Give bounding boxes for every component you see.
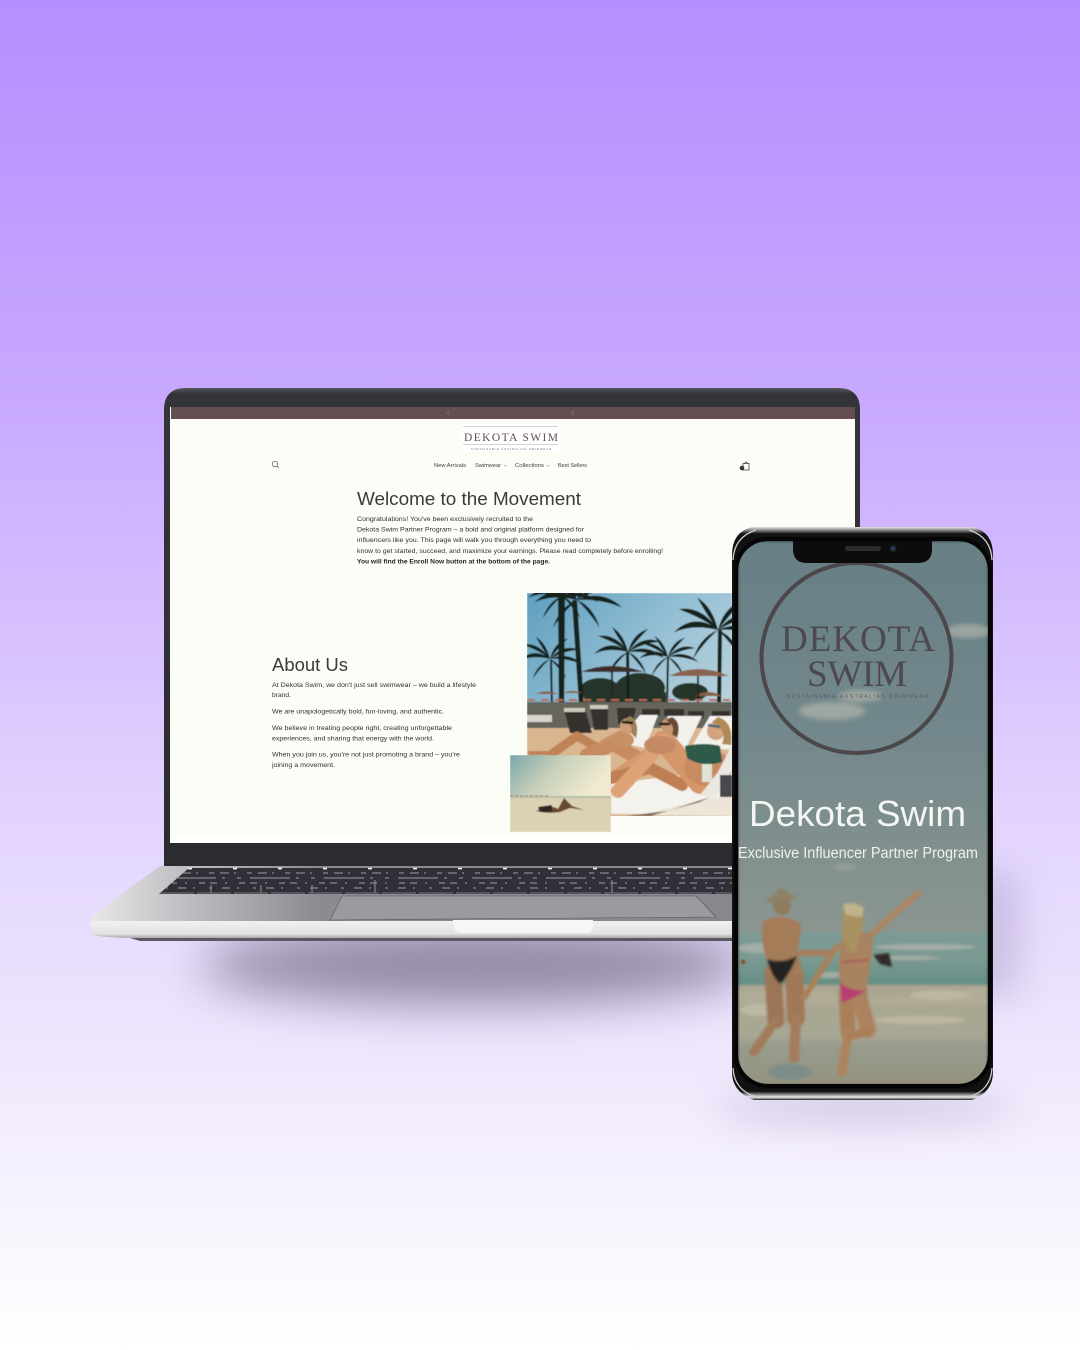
phone screen (738, 541, 990, 1085)
phone body (732, 527, 993, 1100)
clouds (799, 624, 990, 869)
distant swimmer (740, 960, 746, 964)
photo: poolside palms and loungers (527, 593, 732, 816)
background video: beach scene (738, 541, 988, 1085)
lounger mattress (611, 768, 732, 814)
icon: search (272, 461, 279, 468)
welcome paragraph: You will find the Enroll Now button at the bottom of the page. (357, 558, 550, 566)
running women silhouettes (754, 889, 919, 1072)
white cushions (629, 714, 732, 750)
about paragraph: At Dekota Swim, we don't just sell swimwear – we build a lifestyle (272, 682, 476, 689)
circular brand logo: DEKOTA (781, 619, 935, 660)
sunbathers (530, 733, 700, 791)
heading: about us: About Us (272, 655, 348, 675)
welcome paragraph (357, 516, 663, 566)
phone shadow (715, 870, 1020, 1124)
laptop trackpad (330, 896, 716, 920)
laptop trackpad notch (453, 920, 593, 933)
palm trees (527, 593, 732, 703)
welcome paragraph: Congratulations! You've been exclusively recruited to the (357, 516, 533, 523)
phone inner bezel (736, 539, 990, 1086)
welcome paragraph: know to get started, succeed, and maximize your earnings. Please read completely before enrolling! (357, 548, 663, 555)
heading: welcome: Welcome to the Movement (357, 488, 581, 509)
navigation menu (434, 463, 587, 469)
website screen (170, 407, 855, 843)
heads and hair (707, 722, 725, 740)
phone title: Dekota Swim (749, 793, 966, 834)
smartphone (732, 527, 993, 1100)
right woman (804, 893, 919, 1072)
circular brand logo: SWIM (807, 654, 907, 695)
brand logo: DEKOTA SWIM (464, 432, 558, 444)
deck and sand (527, 702, 732, 730)
phone side highlights (733, 530, 992, 1097)
cover-up and drink (700, 745, 732, 798)
circular brand logo: SUSTAINABLE AUSTRALIAN SWIMWEAR (787, 694, 928, 700)
navigation menu: Swimwear (475, 463, 501, 469)
laptop front edge (91, 921, 740, 938)
about paragraph: brand. (272, 692, 291, 699)
photo: woman on the beach (510, 755, 611, 832)
phone notch (793, 541, 932, 563)
icon: shopping bag (740, 462, 749, 470)
left woman (754, 889, 829, 1058)
sun umbrellas (581, 666, 644, 672)
screen background (170, 407, 855, 843)
laptop (91, 388, 860, 941)
laptop underside line (130, 938, 740, 941)
about paragraph: When you join us, you're not just promoting a brand – you're (272, 752, 460, 758)
distant red umbrellas (527, 699, 730, 701)
horizon trees (580, 673, 708, 706)
navigation menu: Collections (515, 463, 544, 469)
about paragraph: We believe in treating people right, creating unforgettable (272, 725, 452, 732)
about paragraph: experiences, and sharing that energy with the world. (272, 736, 434, 742)
circular brand logo (762, 563, 952, 753)
navigation menu: Best Sellers (558, 463, 587, 469)
phone subtitle: Exclusive Influencer Partner Program (738, 845, 978, 862)
about paragraph: joining a movement. (271, 762, 335, 769)
announcement bar (171, 407, 855, 419)
welcome paragraph: influencers like you. This page will walk you through everything you need to (357, 537, 591, 544)
welcome paragraph: Dekota Swim Partner Program – a bold and original platform designed for (357, 526, 585, 534)
laptop keyboard (159, 868, 740, 894)
brand logo: SUSTAINABLE AUSTRALIAN SWIMWEAR (471, 447, 551, 451)
about paragraph: We are unapologetically bold, fun-loving, and authentic. (272, 708, 444, 716)
laptop shadow (200, 925, 750, 1005)
about paragraph (271, 682, 476, 769)
lounge chairs (564, 706, 730, 733)
laptop lid (164, 388, 860, 866)
navigation menu: New Arrivals (434, 463, 466, 469)
laptop base deck (91, 866, 740, 921)
brand logo (461, 424, 560, 451)
